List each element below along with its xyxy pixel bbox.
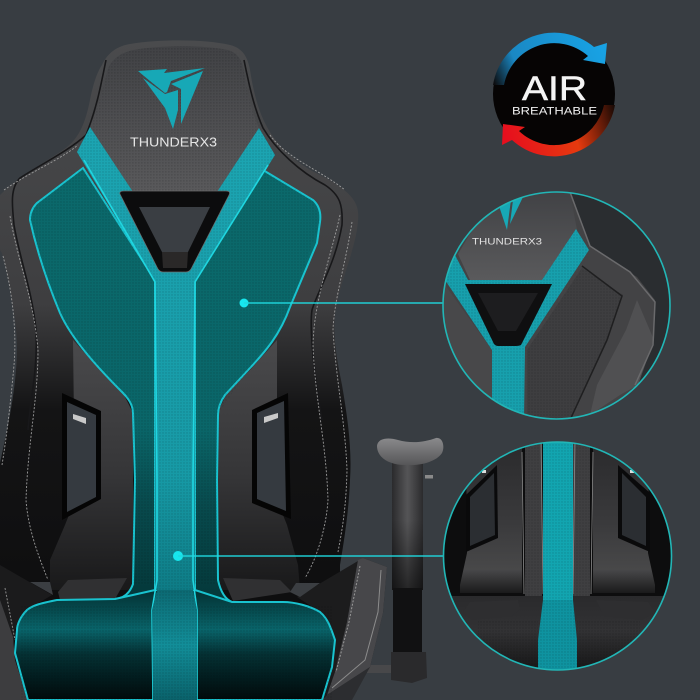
- left belt slot: [62, 393, 101, 520]
- detail circle: headrest and backrest: THUNDERX3: [472, 236, 542, 247]
- ThunderX3 logo: THUNDERX3: [130, 136, 217, 150]
- seat cushion: [15, 590, 335, 700]
- circle ring: [443, 192, 670, 419]
- badge disc: [493, 33, 615, 155]
- headrest opening: [120, 191, 230, 272]
- red airflow arrow: [502, 105, 615, 156]
- breathable mesh right panel: [195, 170, 320, 602]
- breathable mesh left panel: [30, 168, 155, 599]
- lumbar slots: [466, 465, 498, 552]
- callout line: back panel: [240, 298, 444, 308]
- mesh texture: [20, 168, 332, 700]
- badge: AIR breathable: [493, 33, 615, 156]
- circle ring: [444, 442, 672, 670]
- detail circle: headrest and backrest: [440, 188, 675, 430]
- headrest and wing seams: [12, 60, 342, 430]
- chair: [0, 40, 387, 700]
- chair body silhouette: [0, 40, 358, 700]
- seat: [452, 596, 664, 668]
- seat centre strip: [152, 590, 197, 700]
- AIR label: AIR: [522, 70, 587, 108]
- side stitching: [2, 135, 352, 580]
- headrest: [90, 46, 259, 195]
- lower back side panels: [30, 340, 320, 601]
- lumbar cushions: [460, 438, 522, 593]
- perforated strips: [525, 438, 542, 596]
- armrest: [367, 438, 443, 683]
- seat side bolsters: [0, 558, 387, 700]
- right belt slot: [252, 393, 291, 519]
- ThunderX3 logo: [130, 68, 217, 150]
- detail circle: lumbar and seat: [440, 438, 676, 674]
- blue airflow arrow: [493, 33, 607, 85]
- band edge lines: [84, 160, 268, 700]
- teal strip: [543, 438, 573, 600]
- breathable label: BREATHABLE: [512, 106, 597, 118]
- callout line: lumbar strip: [173, 551, 445, 561]
- Y shaped teal band: [77, 127, 275, 590]
